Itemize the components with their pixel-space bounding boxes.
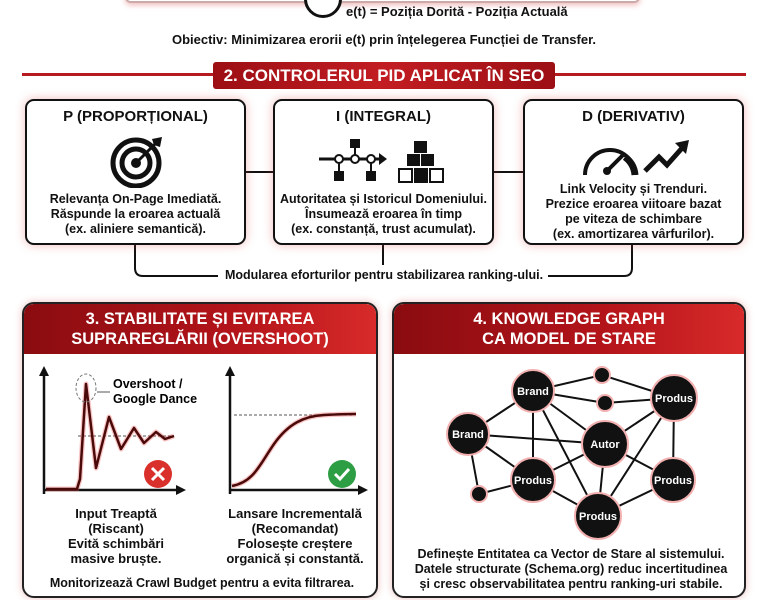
description text: Definește Entitatea ca Vector de Stare al sistemului. [417, 547, 725, 561]
heading: section 2: 2. CONTROLERUL PID APLICAT ÎN SEO [224, 66, 544, 85]
text: incremental [226, 506, 364, 566]
section divider line [22, 73, 746, 76]
icon: timeline and blocks [319, 139, 444, 183]
card: D: Link Velocity și Trenduri. [560, 182, 707, 196]
panel: knowledge graph [392, 302, 746, 598]
text: incremental: (Recomandat) [252, 521, 338, 536]
card: P: Răspunde la eroarea actuală [51, 207, 220, 221]
description text [415, 547, 728, 591]
footer text: Monitorizează Crawl Budget pentru a evita filtrarea. [50, 576, 354, 590]
card: P [25, 99, 246, 245]
chart: step response [39, 366, 368, 495]
card: D: pe viteza de schimbare [565, 212, 702, 226]
graph diagram: Produs [654, 475, 692, 487]
card: I: I (INTEGRAL) [336, 108, 431, 125]
graph diagram: Brand [452, 429, 484, 441]
heading: section 4: 4. KNOWLEDGE GRAPH [473, 310, 665, 328]
chart: step response: Google Dance [113, 392, 197, 406]
top box remnant [125, 0, 640, 3]
card: D: D (DERIVATIV) [582, 108, 685, 125]
card: I: Însumează eroarea în timp [305, 207, 462, 221]
card: P: P (PROPORȚIONAL) [63, 108, 208, 125]
description text: și cresc observabilitatea pentru ranking-uri stabile. [420, 577, 722, 591]
icon: gauge and trend [583, 140, 689, 176]
heading: section 3 [24, 304, 376, 354]
heading: section 4 [394, 304, 744, 354]
card: D: Prezice eroarea viitoare bazat [546, 197, 721, 211]
text: incremental: organică și constantă. [226, 551, 364, 566]
card: P: (ex. aliniere semantică). [65, 222, 206, 236]
description text: Datele structurate (Schema.org) reduc incertitudinea [415, 562, 727, 576]
text: step input: Input Treaptă [75, 506, 157, 521]
graph diagram: Autor [590, 439, 620, 451]
text: step input [68, 506, 164, 566]
formula text: e(t) = Poziția Dorită - Poziția Actuală [346, 4, 568, 19]
card: D [523, 99, 744, 245]
heading: section 2 [213, 62, 555, 89]
card: I [273, 99, 494, 245]
caption: modularea: Modularea eforturilor pentru stabilizarea ranking-ului. [225, 268, 543, 282]
panel: stability [22, 302, 378, 598]
text: step input: Evită schimbări [68, 536, 164, 551]
icon: target [110, 137, 162, 188]
objective text: Obiectiv: Minimizarea erorii e(t) prin înțelegerea Funcției de Transfer. [172, 32, 596, 47]
graph diagram: Produs [579, 511, 617, 523]
graph diagram: Brand [517, 386, 549, 398]
heading: section 4: CA MODEL DE STARE [482, 330, 656, 348]
text: incremental: Lansare Incrementală [228, 506, 362, 521]
card: I: Autoritatea și Istoricul Domeniului. [280, 192, 487, 206]
connectors [134, 171, 633, 277]
graph diagram: Produs [655, 393, 693, 405]
heading: section 3: SUPRAREGLĂRII (OVERSHOOT) [71, 330, 329, 348]
text: step input: (Riscant) [88, 521, 144, 536]
card: P: Relevanța On-Page Imediată. [50, 192, 221, 206]
heading: section 3: 3. STABILITATE ȘI EVITAREA [86, 310, 314, 328]
card: I: (ex. constanță, trust acumulat). [291, 222, 476, 236]
chart: step response: Overshoot / [113, 377, 183, 391]
icon: sum circle [304, 0, 342, 18]
graph diagram: Produs [514, 475, 552, 487]
card: D: (ex. amortizarea vârfurilor). [553, 227, 714, 241]
text: step input: masive bruște. [70, 551, 162, 566]
text: incremental: Folosește creștere [238, 536, 352, 551]
